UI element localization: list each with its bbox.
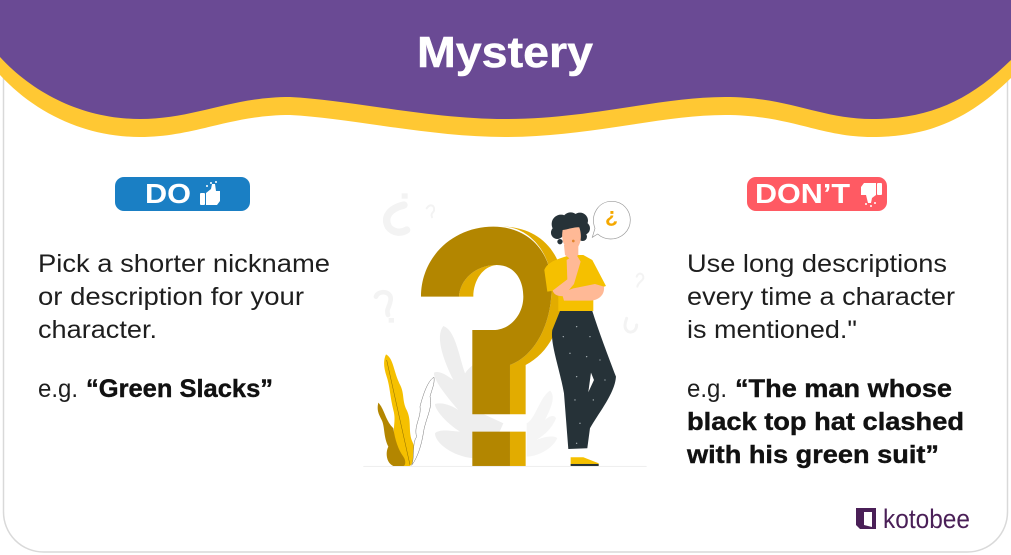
speech bubble xyxy=(592,201,630,239)
badge: DON'T: DON’T xyxy=(755,178,850,209)
lips xyxy=(572,240,575,242)
badge: DON'T xyxy=(747,177,887,211)
face xyxy=(562,227,581,250)
text block: do advice xyxy=(38,250,330,403)
person xyxy=(544,212,616,466)
background question marks xyxy=(376,205,643,332)
arm: crossed forearm xyxy=(562,284,604,301)
plant: yellow leaf xyxy=(384,354,415,466)
text block: don't advice: with his green suit” xyxy=(686,441,939,469)
text block: do advice: Pick a shorter nickname xyxy=(38,250,330,278)
title: Mystery xyxy=(417,28,594,77)
question mark front xyxy=(421,227,552,414)
text block: don't advice xyxy=(686,250,964,469)
icon: thumbs up xyxy=(200,181,220,205)
trouser gap xyxy=(588,373,594,392)
ground line xyxy=(363,465,647,468)
background leaves xyxy=(434,326,503,458)
illustration: thinking person and question mark xyxy=(363,193,647,467)
text block: do advice: character. xyxy=(38,316,157,344)
plant: outlined leaf xyxy=(412,377,434,465)
badge: DO xyxy=(115,177,250,211)
arm: forearm to chin xyxy=(553,254,581,296)
text block: do advice: or description for your xyxy=(38,283,304,311)
hair xyxy=(551,212,590,244)
trouser dots xyxy=(563,326,606,444)
trousers xyxy=(552,311,616,449)
plant: brown leaf xyxy=(378,403,405,466)
text block: don't advice: is mentioned." xyxy=(687,316,857,344)
text block: do advice: e.g. xyxy=(38,375,78,403)
text block: don't advice: “The man whose xyxy=(735,375,952,403)
icon: book logo xyxy=(856,508,876,529)
header band: purple wave xyxy=(0,0,1011,119)
text block: do advice: “Green Slacks” xyxy=(86,375,273,403)
shirt xyxy=(544,255,606,311)
text block: don't advice: black top hat clashed xyxy=(687,408,964,436)
logo: kotobee: kotobee xyxy=(883,504,970,534)
text block: don't advice: e.g. xyxy=(687,375,727,403)
shoe xyxy=(571,457,599,466)
question mark back: dot xyxy=(510,432,526,466)
question mark front: dot xyxy=(472,432,510,466)
question mark back: outer crescent and stem xyxy=(503,227,563,414)
text block: don't advice: every time a character xyxy=(687,283,955,311)
icon: thumbs down xyxy=(861,183,882,207)
neck xyxy=(564,243,578,260)
question mark back: inner crescent xyxy=(459,265,497,297)
text block: don't advice: Use long descriptions xyxy=(687,250,947,278)
header band: yellow wave xyxy=(0,0,1011,137)
badge: DO: DO xyxy=(145,178,191,209)
icon: inverted question mark: ¿ xyxy=(605,204,618,228)
